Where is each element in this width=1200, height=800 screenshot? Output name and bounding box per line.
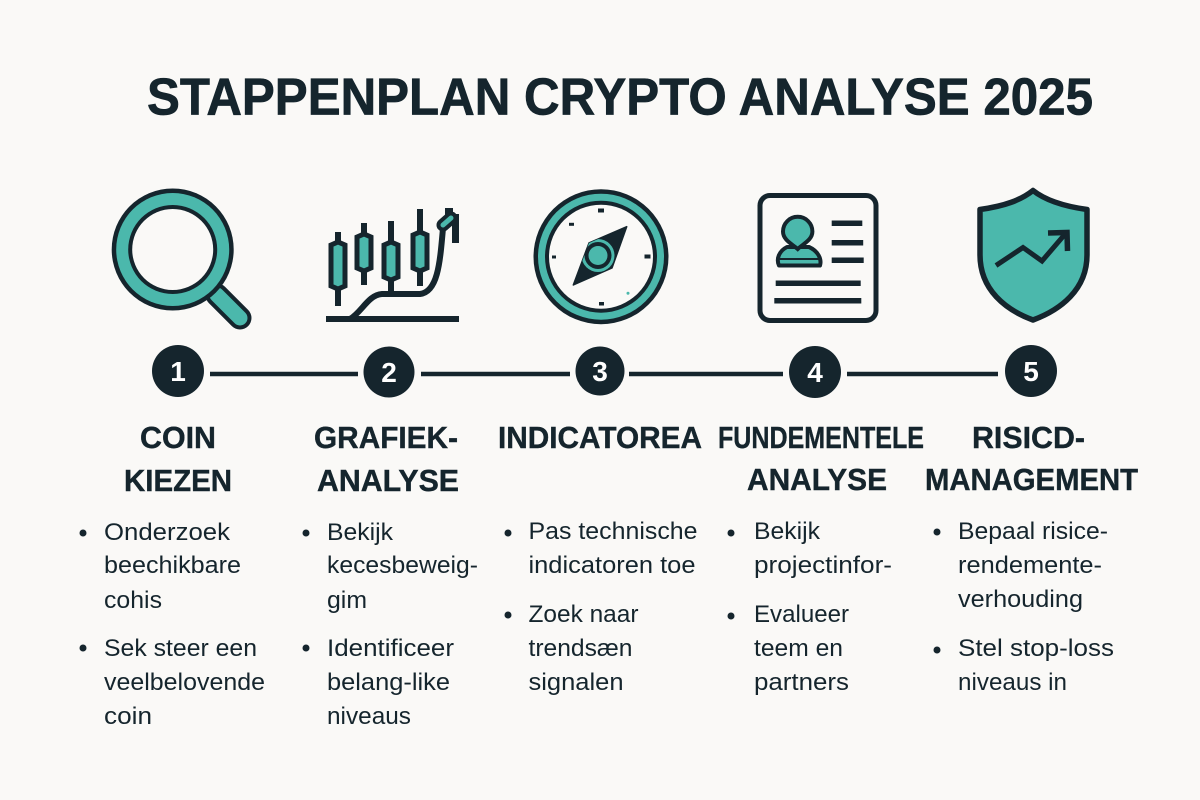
icon: compass [534, 189, 668, 324]
bullet list: step 4: projectinfor- [754, 552, 892, 579]
step number 4 [789, 346, 841, 398]
heading: step 5: MANAGEMENT [925, 462, 1138, 497]
title: STAPPENPLAN CRYPTO ANALYSE 2025 [147, 68, 1093, 126]
bullet list: step 3: Pas technische [528, 518, 698, 545]
bullet list: step 1: cohis [104, 587, 162, 614]
bullet list: step 2: Identificeer [327, 635, 454, 662]
bullet list: step 1: Onderzoek [104, 519, 231, 546]
bullet list: step 2: Bekijk [327, 519, 394, 546]
step number 3: 3 [592, 356, 608, 387]
step number 1 [152, 345, 204, 397]
bullet list: step 1 [80, 519, 265, 730]
bullet list: step 1: Sek steer een [104, 635, 257, 662]
step number 3 [576, 346, 624, 396]
bullet list: step 2 [302, 519, 478, 730]
bullet list: step 1: coin [104, 703, 152, 730]
step number 1: 1 [170, 356, 186, 387]
step number 4: 4 [807, 357, 823, 388]
heading: step 5 [925, 420, 1138, 497]
heading: step 1 [124, 420, 232, 498]
heading: step 2: GRAFIEK- [314, 420, 458, 455]
heading: step 2: ANALYSE [317, 463, 459, 498]
bullet list: step 2: belang-like [327, 669, 450, 696]
bullet list: step 3 [504, 518, 698, 696]
bullet list: step 3: signalen [528, 669, 624, 696]
bullet list: step 4: Bekijk [754, 518, 821, 545]
bullet list: step 4: Evalueer [754, 601, 849, 628]
bullet list: step 4: teem en [754, 635, 843, 662]
icon: shield with rising arrow [980, 190, 1087, 320]
icon: profile document [760, 196, 876, 320]
timeline connector lines [210, 372, 998, 376]
bullet list: step 2: kecesbeweig- [327, 552, 478, 579]
heading: step 4 [718, 420, 924, 497]
bullet list: step 2: niveaus [327, 703, 411, 730]
step number 2: 2 [381, 357, 397, 388]
heading: step 1: COIN [140, 420, 216, 455]
bullet list: step 4: partners [754, 669, 849, 696]
heading: step 1: KIEZEN [124, 463, 232, 498]
step number 5: 5 [1023, 356, 1039, 387]
bullet list: step 3: trendsæn [528, 635, 632, 662]
step number 5 [1005, 345, 1057, 397]
bullet list: step 1: veelbelovende [104, 669, 265, 696]
bullet list: step 5: verhouding [958, 586, 1083, 613]
bullet list: step 4 [728, 518, 892, 696]
bullet list: step 5: Stel stop-loss [958, 635, 1114, 662]
bullet list: step 5: niveaus in [958, 669, 1067, 696]
bullet list: step 5 [934, 518, 1114, 696]
bullet list: step 2: gim [327, 587, 367, 614]
bullet list: step 3: indicatoren toe [528, 552, 696, 579]
heading: step 5: RISICD- [972, 420, 1085, 455]
heading: step 4: FUNDEMENTELE [718, 420, 924, 455]
heading: step 4: ANALYSE [747, 462, 887, 497]
icon: candlestick chart [326, 208, 459, 319]
icon: magnifying glass [112, 188, 240, 318]
bullet list: step 1: beechikbare [104, 552, 241, 579]
step number 2 [364, 346, 414, 398]
bullet list: step 5: Bepaal risice- [958, 518, 1108, 545]
heading: step 2 [314, 420, 459, 498]
heading: step 3: INDICATOREA [498, 420, 702, 455]
bullet list: step 3: Zoek naar [528, 601, 639, 628]
bullet list: step 5: rendemente- [958, 552, 1102, 579]
